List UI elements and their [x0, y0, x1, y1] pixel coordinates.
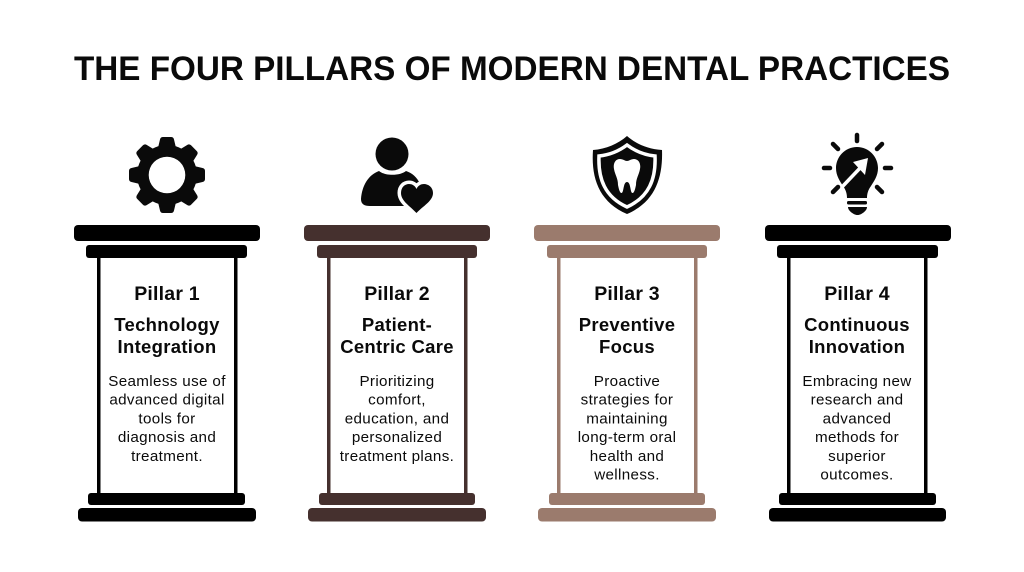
- pillar heading: Innovation: [809, 336, 905, 357]
- pillar description: wellness.: [593, 466, 660, 484]
- pillar label: Pillar 2: [364, 283, 430, 305]
- panel: pillar 4: [765, 135, 951, 522]
- pillar heading: Preventive: [579, 314, 675, 335]
- pillar description: Seamless use of: [108, 373, 226, 390]
- pillar description: tools for: [138, 410, 196, 427]
- pillar description: maintaining: [586, 410, 668, 427]
- panel: pillar 1: [74, 137, 260, 522]
- pillar label: Pillar 3: [594, 283, 660, 305]
- pillar description: long-term oral: [578, 429, 676, 446]
- pillar description: treatment plans.: [340, 448, 454, 465]
- panel: pillar 2: [304, 138, 490, 522]
- pillar description: treatment.: [131, 448, 203, 465]
- icon: shield with tooth: [593, 136, 662, 214]
- pillar description: methods for: [815, 429, 899, 446]
- pillar description: superior: [828, 448, 886, 465]
- pillar description: research and: [811, 392, 903, 409]
- icon: gear: [129, 137, 205, 213]
- icon: patient with heart: [361, 138, 433, 213]
- pillar description: education, and: [345, 410, 449, 427]
- icon: lightbulb with arrow: [824, 135, 891, 215]
- pillar label: Pillar 1: [134, 283, 200, 305]
- pillar description: Proactive: [594, 373, 660, 390]
- pillar description: advanced digital: [109, 392, 225, 409]
- title: THE FOUR PILLARS OF MODERN DENTAL PRACTICES: [74, 50, 950, 88]
- pillar description: diagnosis and: [118, 429, 216, 446]
- pillar description: strategies for: [581, 392, 673, 409]
- pillar heading: Technology: [114, 314, 220, 335]
- pillar description: outcomes.: [820, 466, 894, 484]
- pillar structure: [765, 225, 951, 522]
- pillar structure: [304, 225, 490, 522]
- pillar heading: Patient-: [362, 314, 432, 335]
- pillar description: advanced: [823, 410, 891, 427]
- panel: pillar 3: [534, 136, 720, 522]
- pillar description: Prioritizing: [359, 373, 435, 390]
- pillar heading: Focus: [599, 336, 655, 357]
- pillar heading: Centric Care: [340, 336, 454, 357]
- pillar structure: [534, 225, 720, 522]
- pillar description: Embracing new: [802, 373, 912, 390]
- pillar heading: Continuous: [804, 314, 910, 335]
- pillar description: personalized: [352, 429, 442, 446]
- pillar description: health and: [590, 448, 664, 465]
- pillar structure: [74, 225, 260, 522]
- pillar description: comfort,: [368, 392, 426, 409]
- pillar heading: Integration: [118, 336, 216, 357]
- pillar label: Pillar 4: [824, 283, 890, 305]
